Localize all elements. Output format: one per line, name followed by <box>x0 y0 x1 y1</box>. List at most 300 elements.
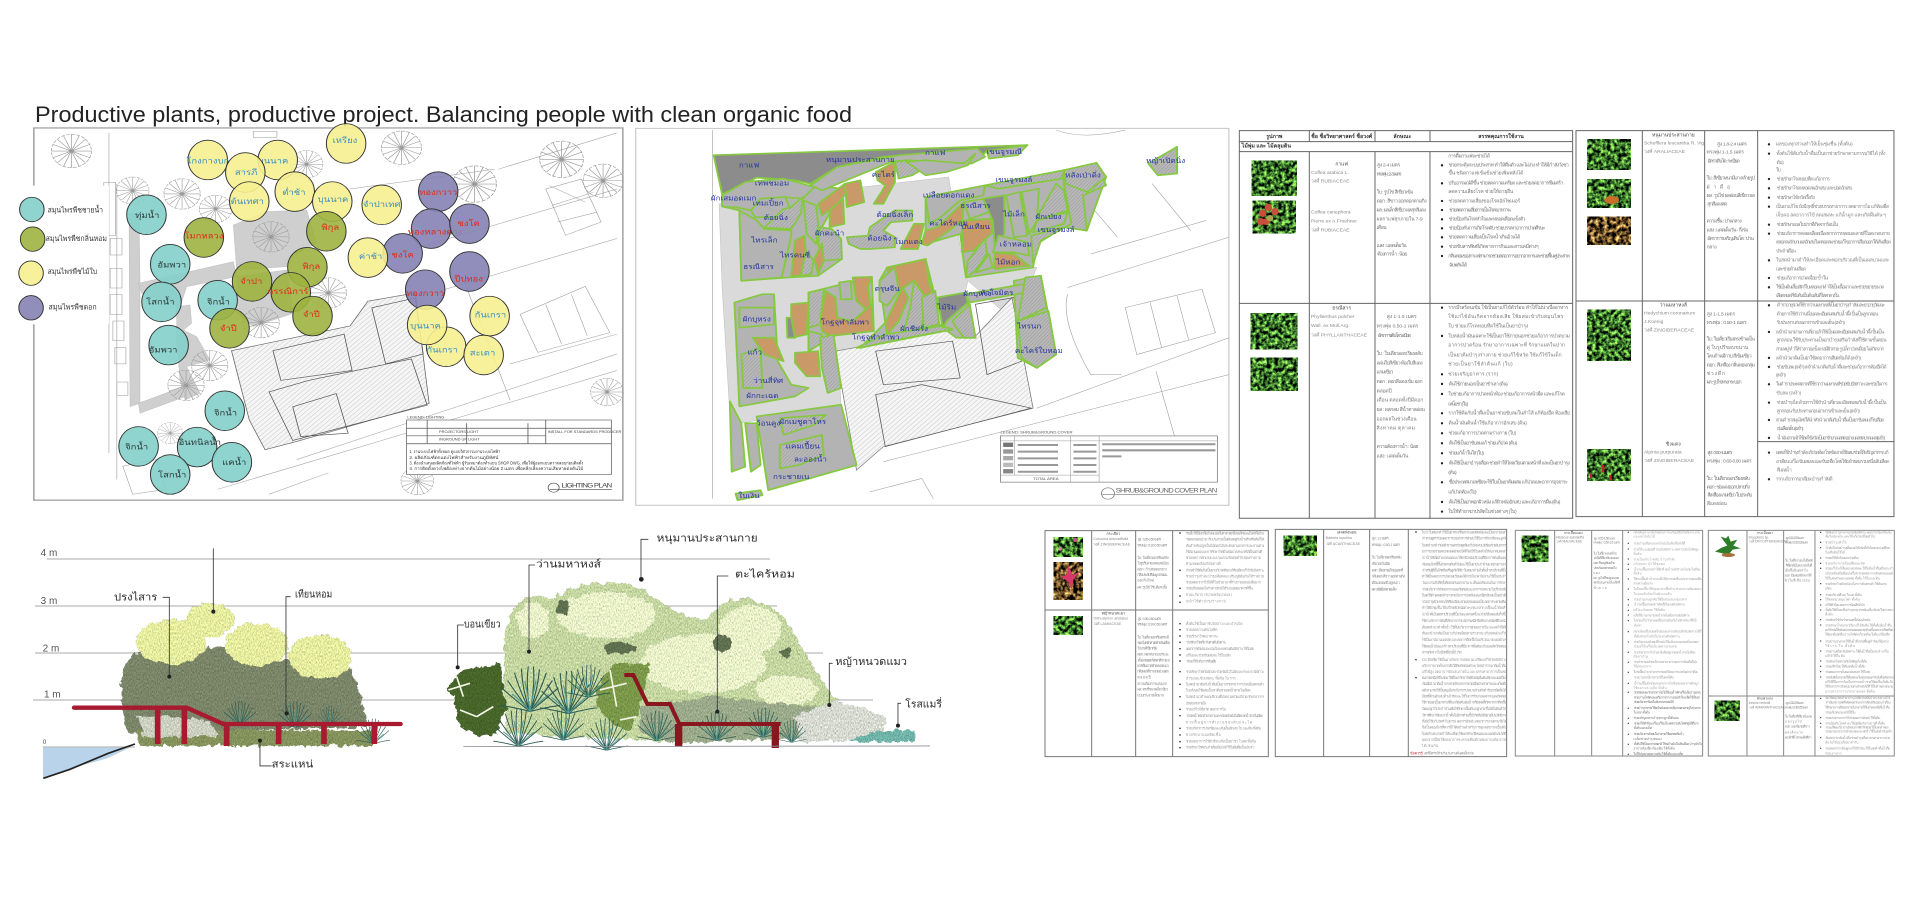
plan frame <box>636 128 1229 505</box>
uses text: แก้ปวดท้องเป็นผื่นแดงเรื้อรัง ช่วยลดอาการอักเสบของแผล <box>1825 569 1893 575</box>
yellow foliage herb circles: ต้นเทศา <box>231 197 264 206</box>
uses text: ลดความเสี่ยงโรค ช่วยให้อายุยืน <box>1448 188 1514 195</box>
uses text: ช่วยลดอาการไข้ตัวร้อน ต้มเป็นยาชา ใบสด ทั้งต้น <box>1186 737 1256 743</box>
uses text: ช่วยแก้น้ำในใส (ใบ) <box>1449 448 1484 457</box>
table grid <box>1515 530 1703 756</box>
uses text: ทาให้เย็นลดอาการปวดแสบร้อนลงได้ภายในเวลาไม่นาน ใช้เป็นประจำ <box>1422 573 1507 579</box>
uses text: ช่วยลดน้ำหนักตัวเบาหวานและช่วยลดไขมันในเลือด ลดน้ำตาลในเลือด <box>1186 713 1264 718</box>
uses text: ใช้ทาแก้อาการคันที่เกิดจากการแพ้สารเคมีหรือพืชบางชนิดที่ผิวหนัง <box>1422 618 1507 623</box>
uses text: ทั้งยังใช้แก้ปวดหัวไมเกรน ลดการอักเสบ ลดอาการบวมตามข้อได้ <box>1422 718 1508 723</box>
uses text: ช่วยแก้อาการปวดหลังปวดเอว <box>1186 592 1232 597</box>
plant names: ขิงแดง <box>1666 440 1681 447</box>
plant details: ใบ : ใบเดี่ยวสีเขียวเข้มแกม <box>1785 714 1812 719</box>
uses text: หัวเหง้าใช้ต้มกินเป็นยาแก้ปวดท้อง แก้ท้องอืด แก้ไข้ ขับปัสสาวะ <box>1186 567 1264 573</box>
lighting legend table: 2. ผลิตภัณฑ์ตกแต่งไฟฟ้าสำหรับงานภูมิทัศน์ <box>409 454 499 461</box>
uses text: ช่วยขับสารพิษที่เกิดจากการกินและสารเคมีต่างๆ <box>1449 243 1539 250</box>
plant details: Curcuma alismatifolia <box>1093 537 1129 541</box>
uses text: ลดอาการอักเสบและบวมในระบบทางเดินปัสสาวะ ใช้ใบสด <box>1186 646 1255 651</box>
uses text: ใบสดนำมาตำให้ละเอียดและพอกบริเวณที่เป็นแผลบวมและ <box>1776 256 1890 264</box>
plant names: Alpinia purpurata <box>1644 450 1682 456</box>
water <box>43 747 130 778</box>
uses text: ช่วยขับลม (เหง้า) เหง้านำมาต้มกับน้ำดื่มจะช่วยแก้อาการท้องอืดได้ <box>1777 361 1887 370</box>
uses text: ช่วยบำรุงธาตุในร่างกาย ใช้ใบ ผล ทั้งต้น <box>1634 674 1675 680</box>
uses text: ด้วยการใช้หัวว่านนึ่งบดละเอียดผสมกับน้ำผึ้ง ปั้นเป็นลูกกลอน <box>1777 309 1879 318</box>
uses text: ใช้ภายนอกเป็นยาทาแก้ผื่น แก้ตุ่มคัน ตุ่มน้ำ หรือแผลที่เกิดจากการติดเชื้อ <box>1422 699 1507 706</box>
uses text: ช่วยป้องกันการเกิดโรคตับ ช่วยบรรเทาอาการปวดศีรษะ <box>1449 225 1546 232</box>
uses text: ใช้เป็นยาบำรุงร่างกาย ช่วยขับปัสสาวะ ลดอาการไข้ แก้ร้อนใน <box>1825 528 1892 535</box>
uses text: ช่วยรักษาแผลติดเชื้อ <box>1186 732 1221 737</box>
handwritten plant labels: กาแฟ <box>739 161 759 169</box>
uses text: ช่วยบำรุงเลือด ขับปัสสาวะ ใช้ต้มน้ำดื่มเป็นประจำ แก้ไอ <box>1825 647 1889 654</box>
table header: รูปภาพ <box>1266 133 1283 141</box>
handwritten plant labels: ละอองน้ำ <box>794 454 827 464</box>
leaders and handwritten labels: ปรงไสาร <box>114 592 158 604</box>
uses text: ก่อนอาหาร <box>1825 751 1842 755</box>
uses text: นอกจากนี้ยังใช้ลดอาการระคายเคืองผิวหนังจากแพ้อากาศ <box>1422 737 1507 742</box>
table header: สรรพคุณการใช้งาน <box>1478 132 1524 140</box>
purple flowering herb circles: ชงโค <box>391 250 414 259</box>
uses text: ต้นใช้สมุนไพรทำยาบำรุงโลหิต ช่วยขับน้ำคาวปลา แก้ไข้ <box>1825 695 1890 701</box>
uses text: กระเจียวใช้เป็นยาพื้นบ้านพบบ่อยในทางภาคเหนือของไทยและเป็นผักพื้นบ้าน <box>1186 529 1264 535</box>
plant characteristics: อัตราการเติบโต : ระเบียด <box>1378 332 1411 339</box>
handwritten plant labels: ไทรเล็ก <box>750 235 777 244</box>
uses text: ช่วยแก้อาการร้อนใน ดับกระหาย ลดไข้ <box>1634 700 1674 704</box>
uses text: ช่วยแก้ไข้ แก้เจ็บคอ ลดเสมหะ ใช้ใบต้มน้ำดื่มเป็นประจำ <box>1825 565 1894 571</box>
uses text: ลูกกลอน รับประทานก่อนอาหารเช้าและเย็น (เหง้า) <box>1777 406 1860 414</box>
plant characteristics: ใบ : สีเขียวหนามีเงา คล้ายรูป <box>1707 175 1755 182</box>
teal waterside herb circles: จิกน้ำ <box>125 441 148 452</box>
plant details: สูง : 0.30-0.60 เมตร <box>1138 616 1161 621</box>
plant details: Dryopteris sp. <box>1749 535 1769 539</box>
plant details: ออกกิ่งใหม่ <box>1137 578 1155 583</box>
legend: herb groups: สมุนไพรพืชไม้ใบ <box>48 268 97 276</box>
plant details: วงศ์ LAMIACEAE <box>1093 621 1122 626</box>
teal waterside herb circles: อัมพวา <box>149 345 178 354</box>
handwritten plant labels: ผักเมชูดาโหร <box>779 418 826 426</box>
height scale labels: 3 m <box>41 596 57 607</box>
purple flowering herb circles: ชงโค <box>457 219 480 228</box>
height scale labels: 2 m <box>43 643 59 654</box>
plant characteristics: ใบ : ใบเดี่ยวออกเรียงสลับ <box>1377 350 1423 357</box>
uses text: ใบอ่อนต้มกินเป็นผักแกงส้ม <box>1633 590 1672 596</box>
plant details: แดง <box>1593 571 1600 575</box>
yellow foliage herb circles: กันเกรา <box>475 310 506 320</box>
uses text: ช่วยบำรุงร่างกาย ใช้ลดไขมันและกระตุ้นการเผาผลาญในร่างกาย <box>1634 706 1701 711</box>
uses text: ฉับพลันได้ <box>1449 262 1467 269</box>
handwritten plant labels: ว้อนคูง <box>756 419 781 427</box>
uses text: ช่วยป้องกันโรคต่างๆ ให้ภูมิคุ้มกันร่างกายดี ทั้งต้น <box>1825 720 1886 726</box>
plant details: ผล : เล็กสีน้ำตาล เมล็ดสีดำ <box>1785 733 1812 739</box>
uses text: กลิ่นหอมของกาแฟสามารถช่วยลดอาการอยากอาหารและช่วยฟื้นฟูประสาท <box>1448 250 1570 259</box>
uses text: ทั้งต้นใช้เป็นยาขับปัสสาวะและบำรุงไต <box>1186 620 1243 627</box>
uses text: ใช้รักษาอาการอักเสบบวมตามผิวหนังได้ดี ใช้ใบตำพอก ลดบวม <box>1825 684 1893 689</box>
spiky ground plants <box>223 700 390 744</box>
plant photo <box>1522 536 1548 562</box>
lighting legend table: INSTALL FOR STANDARDS PRODUCER <box>548 430 622 434</box>
plant characteristics: คู่ ใบรูปรีขอบขนาน <box>1707 344 1749 351</box>
uses text: ต้นราก <box>1634 623 1641 627</box>
handwritten plant labels: ว่านสี่ทิศ <box>753 376 783 385</box>
plant characteristics: ดอก : ดอกสีแดงเข้ม ออก <box>1377 378 1423 385</box>
uses text <box>1825 528 1894 755</box>
uses text: บรรเทาอาการปวดบาดแผล ทั้งต้น <box>1825 689 1876 694</box>
plant names: วงศ์ ARALIACEAE <box>1644 148 1686 155</box>
dark foliage mass <box>121 647 365 733</box>
plant details: น้ำตาล <box>1593 585 1607 590</box>
uses text: ราก แก้อาการอาเจียน บำรุงกำลังดี <box>1776 476 1833 483</box>
parking and courts <box>520 179 610 352</box>
plant characteristics: แสง : แดดเต็มวัน - กึ่งร่ม <box>1707 225 1748 233</box>
potted plant icon <box>1715 536 1741 557</box>
plant names: J.Koenig <box>1644 319 1664 325</box>
plant names: Phyllanthus pulcher <box>1311 314 1355 320</box>
building <box>835 298 1033 470</box>
plant details: เดือน ตลอดปี-ฤดูหนาว <box>1372 580 1400 585</box>
plant characteristics: สิงหาคม ตุลาคม <box>1377 425 1415 432</box>
lighting legend table: 4. การติดตั้งดวงไฟต้องห่างจากต้นไม้อย่างน้อย 2 เมตร เพื่อหลีกเลี่ยงความเสียหายต่อต้นไม้ <box>409 466 583 472</box>
uses text: ได้เช่นกัน <box>1421 743 1439 748</box>
plant names: วงศ์ PHYLLANTHACEAE <box>1311 331 1368 338</box>
uses text: (ต้น) <box>1448 469 1457 476</box>
handwritten plant labels: เปลือยดอกแดง <box>923 191 975 200</box>
handwritten plant labels: ผักกะเฉด <box>746 392 779 400</box>
uses text: เป็นยาต้มบำรุงร่างกาย ช่วยแก้ไข้หวัด ใช้แก้ไข้ในเด็ก <box>1448 350 1562 358</box>
plant photos <box>1715 536 1741 721</box>
plant names: กาแฟ <box>1335 162 1348 168</box>
bullets <box>1438 165 1446 512</box>
plant details: ปลายกิ่ง ออกตามซอกใบ <box>1593 565 1617 570</box>
uses text: ใบหล่อน้ำมันเฉพาะใช้เป็นยาใช้ภายนอกช่วยแก้อาการปวดบวม <box>1448 330 1570 339</box>
uses text: ข้อควรรู้ <box>1410 750 1423 755</box>
site lines and courts <box>713 130 1229 499</box>
uses text: เมล็ดใช้บำรุงร่างกาย ลดน้ำตาลในเลือด ช่วยขับปัสสาวะ <box>1633 611 1690 618</box>
uses text: แก้ลม <box>1825 586 1832 590</box>
plant details: สูง : 1-2 เมตร <box>1372 536 1389 541</box>
uses text: แก้ไอ แก้เสมหะ ใช้ทั้งต้น <box>1633 607 1666 612</box>
plant photos <box>1054 537 1083 635</box>
upper left beds <box>722 154 976 281</box>
yellow foliage herb circles: บุนนาค <box>410 321 441 331</box>
leaders and handwritten labels: หนุมานประสานกาย <box>657 534 758 545</box>
handwritten plant labels: ผักบุหรง <box>743 315 771 324</box>
uses text <box>1776 139 1891 483</box>
uses text: ทำให้ผิวชุ่มชื้น ใช้แก้โรคผิวหนังต่างๆ เช่น กลาก เกลื้อน น้ำกัดเท้า <box>1422 605 1507 611</box>
uses text: ต้นแก่นำมาต้มเป็นยาแก้ปวดเมื่อยตามร่างกาย แก้ปวดหลัง แก้ไข้ <box>1422 630 1507 636</box>
spider plants <box>493 665 807 750</box>
uses text <box>1448 152 1570 515</box>
lighting legend table: LEGEND: LIGHTING <box>407 416 445 419</box>
plant characteristics: สีแดงอ่อน <box>1707 500 1727 507</box>
pale shrubs right <box>793 700 887 742</box>
paving base <box>719 177 1037 423</box>
shrub plan title: SHRUB&GROUND COVER PLAN <box>1116 486 1217 494</box>
plant characteristics: ดอก : สีขาว ออกดอกตามกิ่ง <box>1377 197 1427 204</box>
plant details: ใบ : ใบเดี่ยวออกเรียงตรง มี <box>1137 634 1170 639</box>
uses text: ใช้เป็นยาสมานแผลสด และลดการติดเชื้อในบริเวณบาดแผลต่างๆ <box>1422 636 1507 642</box>
plant details: กลีบประดับสีชมพู ปลายมน <box>1137 572 1168 577</box>
height scale labels: 4 m <box>41 548 57 559</box>
table grid <box>1275 529 1507 757</box>
plant photos <box>1251 161 1298 391</box>
lower shrubs <box>640 697 830 743</box>
uses text: ช่วยแก้ตัวร้อน ใช้ต้นสดต้มน้ำ ทั้งต้น <box>1825 664 1866 669</box>
uses text: ใบช่วยแก้อาการปวดหน้าท้อง ช่วยแก้อาการหน้ามืด และแก้โรค <box>1448 390 1565 397</box>
uses text: น้ำกระเจี๊ยบช่วยทำให้ผิวดี ลดน้ำหนักตัว ลดไขมันในเลือด <box>1634 566 1700 571</box>
uses text <box>1410 528 1508 755</box>
plant characteristics: แกมเขียว <box>1377 369 1394 376</box>
plant characteristics: ทรงพุ่ม : 0.50-1 เมตร <box>1707 320 1747 326</box>
lower right beds <box>937 276 1056 368</box>
plant details: สูง : 0.20-0.50 เมตร <box>1138 537 1161 542</box>
teal waterside herb circles: จิกน้ำ <box>207 295 230 306</box>
handwritten plant labels: หนุมานประสานกาย <box>826 155 895 164</box>
uses text: เลือดหมดที่ขับต้นเป็นต้นเส้นที่ไหลกลางใน <box>1776 291 1840 299</box>
uses text: น้ำกระเจี๊ยบช่วยลดการติดเชื้อในทางเดินปัสสาวะ <box>1634 602 1686 607</box>
uses text: ช่วยแก้อาการปวดเมื่อย ข้ำใน <box>1777 272 1829 281</box>
uses text: ห้ามหยดเลือดได้อย่างดี <box>1186 561 1221 566</box>
plant characteristics: สูง : 0.50-1 เมตร <box>1707 450 1733 456</box>
table header <box>1241 132 1524 149</box>
yellow foliage herb circles: กันเกรา <box>426 345 458 354</box>
uses text: เมล็ดช่วยบำรุงสมอง <box>1633 735 1662 742</box>
uses text: ทั้งต้น <box>1633 571 1642 576</box>
table 4: long text sheet <box>1275 528 1508 757</box>
uses text: แก้ไข้ตัวร้อน ลดอาการท้องเสียทั่วไป <box>1825 602 1865 607</box>
table grid <box>1576 131 1894 517</box>
uses text: และช่วยห้ามเลือด <box>1776 265 1806 272</box>
bullets <box>1819 532 1823 748</box>
plan frame <box>34 128 623 500</box>
plant details: ดอก : เป็นสปอร์เกิดจากใต้ <box>1785 572 1812 578</box>
green fragrant herb circles: โมกหลวง <box>184 231 223 240</box>
plant characteristics: ออกผลในช่วงเดือน <box>1377 415 1417 422</box>
plant characteristics: โคนก้านมีกาบ สีเข้มเขียว <box>1707 353 1752 360</box>
plant names: ธรณีสาร <box>1332 304 1351 311</box>
uses text: ดอกแห้งชงดื่มช่วยลดไขมันและความดัน เมล็ดขับปัสสาวะได้ดี <box>1633 627 1702 633</box>
uses text: ใบสดใช้ตำผสมเหล้าขาวทาแก้อาการปวดฟันและเหงือกอักเสบเป็นอย่างดี <box>1422 592 1507 598</box>
uses text: ช่วยแก้ไขไข้หวัด ลดอาการไอ <box>1186 707 1226 712</box>
plant names: Pierre ex A.Froehner <box>1311 218 1357 224</box>
uses text: ช่วยแก้อาการคลอดเลือดเนื่องจากการหลอมละลายที่ในตะกอนกาย <box>1777 230 1890 237</box>
plant details: วงศ์ MALVACEAE <box>1556 540 1583 544</box>
uses text: แก้ไข้ ใช้ใบ ต้น <box>1825 654 1846 658</box>
uses text: แก้ไข้ที่มีอาการร้อนในกระหายน้ำ ช่วยให้สดชื่น ทั้งต้น ใบ <box>1825 679 1893 684</box>
plant characteristics: ผล : ผลเล็กสีเขียว ผลสุกสีแดง <box>1377 205 1427 213</box>
uses text: ช่วยแก้อาการปวดตามร่างกาย (ใบ) <box>1449 430 1517 437</box>
handwritten plant labels: คะไดร์หอม <box>929 219 968 227</box>
plant details: แดงรูปไข่ <box>1785 720 1802 724</box>
uses text: ช่วยลดอาการท้องผูก แก้ไข้ตัวร้อน ใช้ใบสดตำคั้นน้ำดื่ม <box>1825 746 1890 751</box>
building rooms <box>269 298 427 440</box>
uses text: ช่วยรักษาโรคผิวหนัง แก้อาการคันตามตัว ใช้ต้มอาบ <box>1825 581 1887 586</box>
understory <box>137 730 377 746</box>
uses text: นิยมปลูกไว้ประจำบ้านเพื่อใช้รักษาเบื้องต้น ปลูกง่าย ขึ้นได้ในดินทั่วไป <box>1421 706 1508 711</box>
green fragrant herb circles: กรรณิการ์ <box>268 287 309 296</box>
uses text: ช่วยบำรุงเลือดและลดไขมันในเส้นเลือดได้ดี <box>1634 540 1685 546</box>
uses text: ช่วยลดความเสี่ยงของโรคอัลไซเมอร์ <box>1449 197 1521 204</box>
uses text: ใบช่วยแก้ไอ รักษาแผลเปื่อย ช่วยป้องกันโรคผิวหนัง แก้ฝี ทั้ง <box>1633 618 1697 623</box>
handwritten plant labels: ผักคะน้า <box>815 229 844 237</box>
handwritten plant labels: โกฐจุฬาลำพา <box>852 333 900 341</box>
plant details: วงศ์ AMARANTHACEAE <box>1749 705 1786 709</box>
plant details: ใบ : ใบเดี่ยว แผ่นคล้าย <box>1593 550 1617 555</box>
uses text: ช่วยป้องกันโรคตับ บำรุงกำลัง <box>1633 556 1675 562</box>
uses text: ใบสดนำมาตำกับเหล้าขาวพอกช่วยดูดพิษ แก้ปวดแสบปวดร้อน ช่วยดับอาการ <box>1422 542 1507 547</box>
table 3: curcuma and orthosiphon <box>1045 529 1268 757</box>
uses text: ต้มรับประทาน และใช้แก้ปวดเมื่อยทั่วไป <box>1825 534 1875 539</box>
leaders and handwritten labels: บอนเขียว <box>464 618 501 630</box>
uses text: ช่วยรักษาโรคความดันโลหิตสูง ใบ ทั้งต้น <box>1826 658 1868 663</box>
plant characteristics: ใบ : ใบเดี่ยวออกเรียงสลับ <box>1707 475 1750 482</box>
leaders and handwritten labels: ตะไคร้หอม <box>735 568 795 580</box>
uses text: ช่วยลดการอักเสบและบวมตามข้อต่อทั่วไปของร่างกาย <box>1186 555 1261 560</box>
plant names: Coffea arabica L. <box>1311 170 1349 176</box>
uses text: ใบสดล้างสะอาดตำให้ละเอียด ใช้พอกรักษาฝีหนองและแผลอักเสบได้ดี <box>1422 731 1507 736</box>
plant details: แบบกระจายเล็กมาก <box>1137 691 1164 697</box>
uses text: ต้น) <box>1776 159 1784 166</box>
plant characteristics: กลาง <box>1707 245 1717 251</box>
uses text: ทั้งต้น <box>1825 612 1834 617</box>
uses text: ขึ้น ชนิดกาแฟเข้มข้นช่วยเพิ่มพลังได้ <box>1448 168 1523 177</box>
plant details: ขอบใบหยักห่างคล้ายฟันเลื่อย <box>1137 640 1170 645</box>
handwritten plant labels: ธรณีสาร <box>960 201 991 210</box>
plant details: Hibiscus sabdariffa <box>1556 536 1584 540</box>
height scale labels <box>41 548 61 746</box>
uses text: นำน้ำใช้เพื่อล้างบาดแผลและใช้ทาผิวหนังบริเวณที่มีอาการคัน ผื่นแดง <box>1422 555 1507 560</box>
plant characteristics: เดือน ตลอดทั้งปีมีดอก <box>1377 395 1423 404</box>
uses text: ใบ นำใบสดมาตำใช้เป็นยาทาแก้พิษจากแมลงกัดต่อยและเป็นยาภายนอก <box>1422 528 1507 534</box>
plant names <box>1644 132 1704 464</box>
uses text: อาการปวดร้อน รักษาอาการเฉพาะที่ รักษาแผลในปาก <box>1448 341 1565 348</box>
lighting legend table: INGROUND UP LIGHT <box>439 438 480 441</box>
yellow foliage herb circles: ค่าช้า <box>359 252 382 261</box>
plant details: ดอก : ออกเป็นช่อสีขาว <box>1785 723 1810 729</box>
plant characteristics: ผล : ผลกลม สีน้ำตาลอ่อน <box>1377 404 1426 413</box>
uses text: น้ำกระเจี๊ยบต้มช่วยบรรเทาอาการไอ เจ็บคอ ลดอาการคัดจมูก <box>1634 679 1699 685</box>
plant characteristics: อัตราเติบโต : ระเบียด <box>1707 157 1740 164</box>
plant details: สีเขียวเข้มใบหนา ชอบในที่ <box>1786 563 1812 568</box>
plant details: ใบบางสีเขียวเข้ม <box>1137 646 1158 651</box>
purple flowering herb circles: ทองหลางด่าง <box>408 227 462 236</box>
handwritten plant labels: เทพชมอม <box>755 179 789 187</box>
uses text: อาการบวมช่วยลดบาดแผลอักเสบได้ดีโดยใช้ใบสดล้างให้สะอาดบดพอก <box>1422 549 1507 554</box>
bullets <box>1177 533 1183 748</box>
plant characteristics: สูง 1-1.5 เมตร <box>1387 314 1417 320</box>
plant characteristics: ทรงพุ่ม 0.50-1 เมตร <box>1377 324 1419 330</box>
plant details: ผล : แห้งเมื่อ หลายเมล็ด <box>1372 585 1397 591</box>
yellow foliage herb circles: สารภี <box>235 168 258 177</box>
lighting legend table: 3. ต้องนำเสนอผลิตภัณฑ์ไฟฟ้า ผู้รับเหมาต้องทำแบบ SHOP DWG. เพื่อให้ผู้ออกแบบตรวจสอบก่อนติดตั้ง <box>409 460 583 466</box>
uses text: ต้นสมุนไพรนี้ขึ้นง่ายตามดินทั่วไปและใช้เป็นยาประจำบ้านมาอย่างยาวนาน <box>1422 560 1508 567</box>
yellow foliage herb circles: โกงกางบก <box>186 156 229 165</box>
plant details <box>1749 530 1813 739</box>
plant characteristics: สุกสีแดงสด <box>1707 201 1727 208</box>
plant characteristics: ผลกาแฟสุกภายใน 7-9 <box>1377 215 1423 222</box>
plant characteristics: สูง 1.8-2.4 เมตร <box>1717 141 1747 147</box>
uses text: ช่วยบำรุงผิวพรรณให้เรียบเนียน ช่วยลดรอยแผลเป็น ลดการระคายเคือง <box>1422 598 1507 605</box>
handwritten plant labels: เขนจูรมณี <box>987 148 1022 156</box>
uses text: อาการท้องอืด ท้องเฟ้อ ใช้ทั้งต้น <box>1633 746 1676 751</box>
uses text: ผลของทุกส่วนทำให้เย็นชุ่มชื่น (ทั้งต้น) <box>1776 139 1853 148</box>
dark shadow tufts <box>557 599 790 659</box>
uses text: อาเจียน แก้ไอ ขับเสมหะและขับเหงื่อ โดยใช้เหง้าผสมรวมหนึ่งเส้นเลือด <box>1776 458 1889 465</box>
yellow foliage herb circles: จำปาเทศ <box>363 200 401 209</box>
uses text: ช่วยบำรุงกระดูก ฟัน ใช้เป็นส่วนประกอบอาหาร <box>1634 596 1687 603</box>
uses text: ช่วยรักษาโรคไตอักเสบ ช่วยขับนิ่วในไตและกระเพาะปัสสาวะ <box>1186 669 1264 674</box>
handwritten plant labels: หัวใจมิตร <box>980 288 1013 297</box>
handwritten plant labels: หญ้าเปิดนิ่ง <box>1146 155 1185 165</box>
plant details: ทรงพุ่ม : 0.10-0.30 เมตร <box>1785 541 1809 546</box>
legend: herb groups <box>19 197 107 320</box>
uses text: ช่วยรักษาโรคเบาหวาน <box>1186 633 1218 638</box>
teal waterside herb circles: ทุ่มน้ำ <box>135 209 160 221</box>
uses text: ช่วยลดความเสี่ยงเป็นโรคน้ำเกินอ้วนได้ <box>1449 232 1520 241</box>
section: scale grid lines <box>33 559 873 747</box>
plant characteristics: ใบ : ใบเดี่ยวเรียงตรงข้ามเป็น <box>1707 334 1756 342</box>
plant characteristics: ตลอดปี <box>1377 387 1392 394</box>
handwritten plant labels <box>711 148 1185 500</box>
uses text: อุ่นเลือดเย็น (เหง้า) <box>1777 424 1804 432</box>
red bench <box>624 675 781 748</box>
top dark shrub beds <box>714 145 1027 194</box>
uses text: ต้นใช้เป็นยาบำรุงเลือด ช่วยทำให้ไหลเวียนตามหน้าที่ และเป็นยาบำรุง <box>1449 459 1570 467</box>
uses text: ช่วยแก้ไข้ แก้อาการท้องเสีย <box>1186 658 1216 663</box>
plant names: Coffea canephora <box>1311 210 1351 216</box>
uses text: กลีบเลี้ยงนำมาต้มกินเป็นน้ำกระเจี๊ยบเพื่อช่วยดับกระหาย <box>1633 528 1700 534</box>
plant details: กระเจียว <box>1106 531 1120 536</box>
uses text: ใช้ราก ใบ ทั้งต้น <box>1825 643 1856 648</box>
plant details: ดอก : ก้านช่อดอกยาว <box>1137 566 1167 571</box>
uses text: ช่วยรักษาแผลในปากที่เกิดจากร้อนใน <box>1777 221 1839 228</box>
uses text: ช่วยรักษาโรคเกี่ยวกับทางเดินปัสสาวะ <box>1186 640 1226 645</box>
water bank <box>43 744 135 778</box>
plant details: ทรงพุ่ม : 0.30-0.50 เมตร <box>1137 623 1167 628</box>
plant details: ผิวใบสีเขียวอ่อน <box>1785 578 1811 583</box>
plant characteristics: ดอก : สีเหลือง กลิ่นหอมกลุ่ม <box>1707 361 1755 368</box>
plant names: Hedychium coronarium <box>1644 311 1695 317</box>
light green crowns <box>517 592 818 705</box>
plant characteristics: ทรงพุ่ม : 2-3 เมตร <box>1377 171 1402 177</box>
purple flowering herb circles: ทองกวาว <box>419 188 457 197</box>
plant details: ใบรูปรีปลายแหลม ห่อโอบ <box>1137 561 1170 566</box>
yellow foliage herb circles: เหรียง <box>333 136 357 145</box>
uses text: ช่วยบำรุงไต ด้วยการใช้หัวนำเคี่ยวละเอียดผสมกับน้ำผึ้ง ปั้นเป็น <box>1777 397 1887 406</box>
uses text: ช่วยลดอาการเจ็บคอ ลดเสมหะ ใช้ใบสด <box>1825 668 1870 674</box>
uses text: ต้นสดนำมาต้มน้ำดื่ม ช่วยบำรุงเลือด บรรเทาอาการปวด <box>1825 735 1890 741</box>
bullets <box>1765 144 1773 479</box>
uses text: ช่วยแก้พิษ แก้อาการอักเสบจากสัตว์กัดต่อย ใช้ใบสดตำพอก <box>1825 725 1889 729</box>
plant details: Orthosiphon aristatus <box>1093 616 1128 620</box>
uses text: เป็นยาแก้ไข ยังมีฤทธิ์ช่วยบรรเทาอาการ ลดอาการไอ แก้ท้องอืด <box>1776 202 1889 210</box>
uses text: บำรุงและขับเสมหะ ทั้งต้น ใบ ราก <box>1186 675 1236 681</box>
green fragrant herb circles: จำปี <box>303 310 320 319</box>
plant details: กระเจี๊ยบแดง <box>1564 530 1583 535</box>
uses text: ช่วยแก้ไข้ตัวร้อนและปวดท้อง <box>1825 556 1859 560</box>
uses text: ช่วยรักษาไข้ป่วง รักษาแผลเรื้อรังบนผิวหนัง <box>1825 617 1871 622</box>
plant details: ผล : ทรงรีขนาดเล็ก เขียว <box>1137 686 1168 692</box>
handwritten plant labels: บันเทียน <box>961 222 990 231</box>
plant details: กระเบื้องผา <box>1757 530 1773 535</box>
purple flowering herb circles <box>383 172 489 309</box>
lighting plan title <box>548 481 612 492</box>
plant photos <box>1587 139 1631 481</box>
green fragrant herb circles <box>184 211 346 348</box>
plant details: ดอก : มีดอกช่อใหญ่ออกที่ <box>1372 567 1404 572</box>
uses text: ตามความต้องการ <box>1633 581 1654 585</box>
uses text: ช่วยฟื้นฟูการทำงานของตับและไต <box>1186 719 1253 724</box>
handwritten plant labels: คะไดร์ <box>872 170 895 179</box>
uses text: ตามตำราสมุนไพรให้นำหัวนำมาต้มกับน้ำดื่มเป็นยาขับลมแก้ไขเลือด <box>1776 414 1884 423</box>
